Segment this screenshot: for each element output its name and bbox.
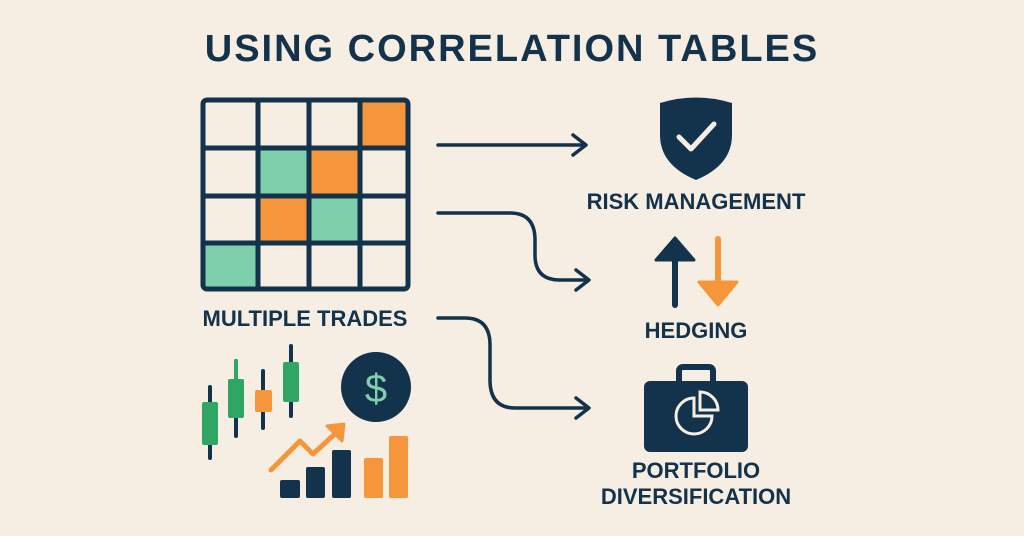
icon: dollar coin bbox=[341, 352, 411, 422]
panel: correlation grid bbox=[203, 100, 408, 289]
label: portfolio diversification: PORTFOLIO bbox=[632, 458, 760, 483]
label: hedging: HEDGING bbox=[645, 318, 747, 343]
icon: growth bar chart bbox=[271, 424, 408, 498]
label: multiple trades: MULTIPLE TRADES bbox=[203, 306, 407, 331]
arrow: to portfolio diversification bbox=[438, 318, 589, 418]
label: portfolio diversification bbox=[601, 458, 791, 509]
icon: dollar coin: $ bbox=[365, 367, 387, 411]
icon: hedging arrows bbox=[656, 238, 737, 305]
icon: shield bbox=[660, 98, 732, 180]
title: USING CORRELATION TABLES bbox=[205, 28, 819, 70]
arrow: to hedging bbox=[438, 213, 589, 290]
arrow: to risk management bbox=[438, 135, 586, 155]
label: portfolio diversification: DIVERSIFICATION bbox=[601, 484, 791, 509]
icon: candlesticks bbox=[202, 346, 299, 458]
icon: briefcase bbox=[644, 367, 748, 452]
label: risk management: RISK MANAGEMENT bbox=[587, 189, 805, 214]
